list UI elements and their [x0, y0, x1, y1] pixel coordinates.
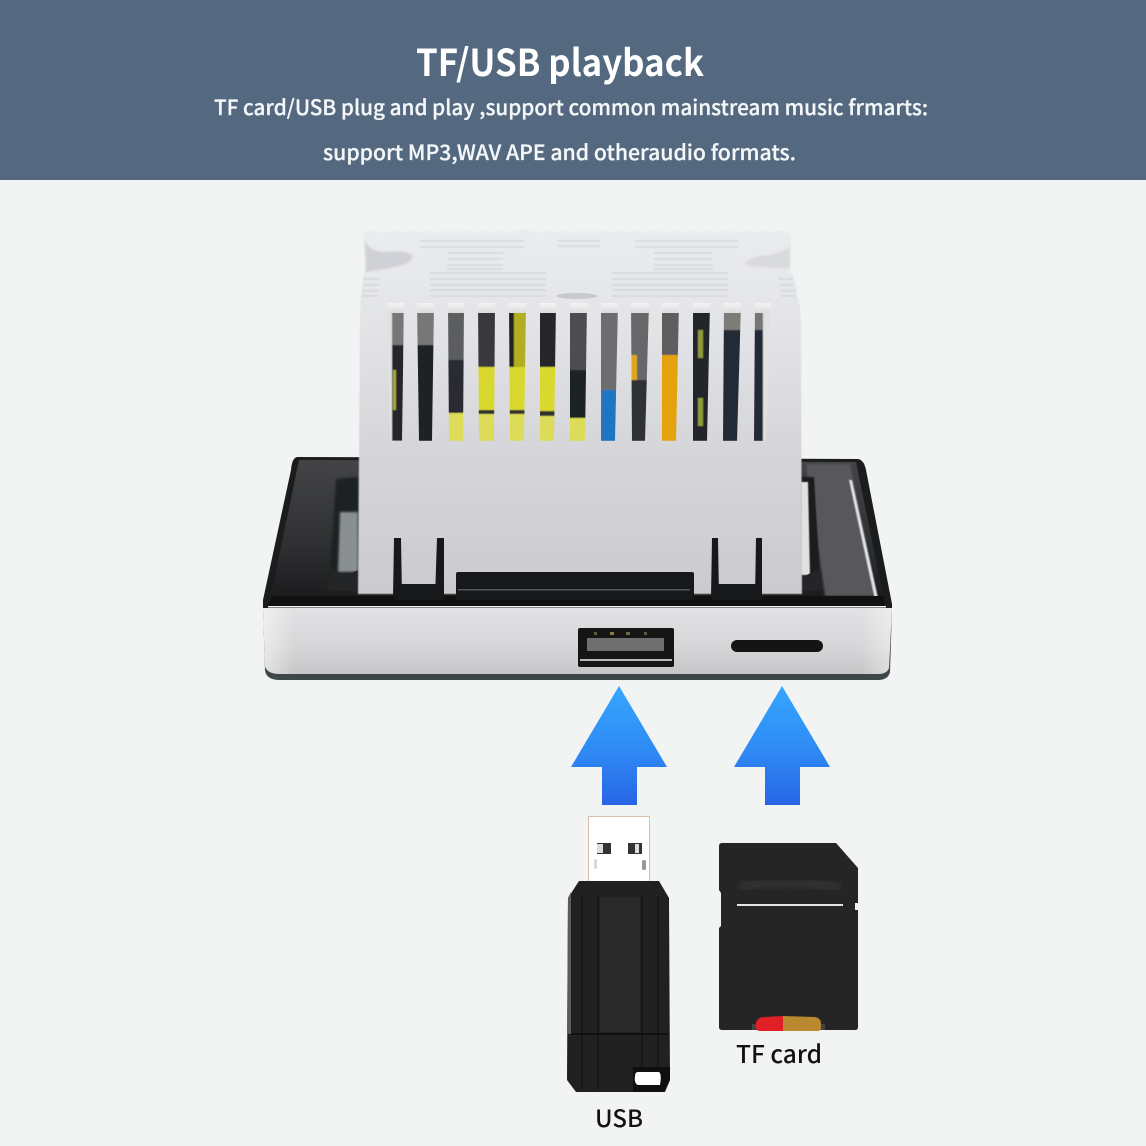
- USB port: [578, 628, 674, 667]
- arrow: TF card insert: [734, 686, 830, 805]
- housing silhouette: [358, 229, 802, 594]
- white housing: [358, 229, 802, 600]
- drive body: [567, 881, 670, 1092]
- arrow: USB insert: [571, 686, 667, 805]
- lid corner recesses: [364, 240, 412, 272]
- label: TF card: TF card: [736, 1036, 822, 1071]
- slot lips: [380, 303, 780, 313]
- lid moulded lines: [362, 241, 796, 296]
- label: USB: USB: [595, 1099, 643, 1134]
- card contacts: [756, 1016, 821, 1031]
- USB plug: [588, 816, 650, 882]
- lower notches: [393, 538, 762, 600]
- front edge with USB and TF ports: [263, 606, 892, 680]
- description line 1: TF card/USB plug and play ,support common mainstream music frmarts:: [214, 92, 928, 122]
- ventilation slots with circuit board visible: [380, 303, 780, 443]
- description line 2: support MP3,WAV APE and otheraudio formats.: [323, 137, 796, 167]
- TF / SD card: [719, 843, 858, 1031]
- product photo: wall amplifier: [263, 229, 892, 680]
- header band: [0, 0, 1146, 180]
- title: TF/USB playback: [416, 33, 705, 87]
- USB flash drive: [567, 816, 670, 1092]
- TF card slot: [731, 640, 823, 652]
- base plate: [263, 457, 892, 612]
